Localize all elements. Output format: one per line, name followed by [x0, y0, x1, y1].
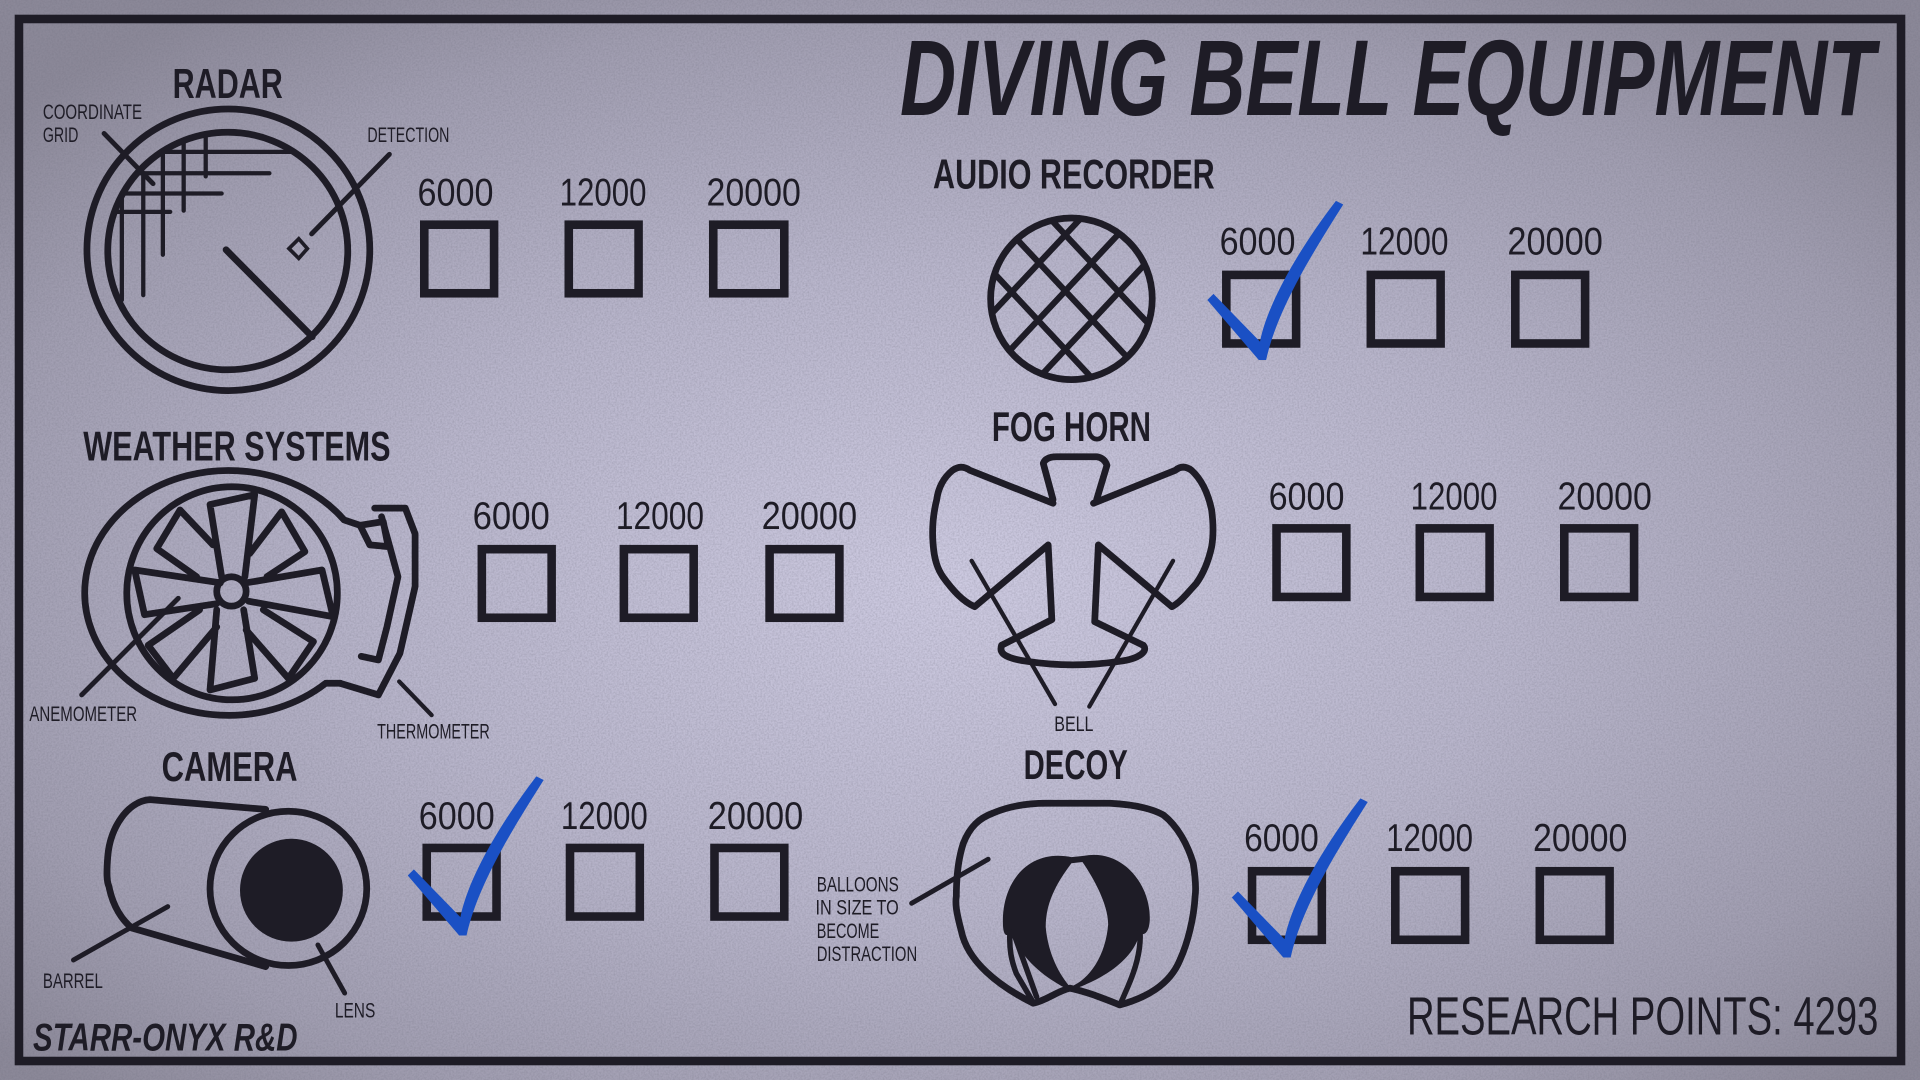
- heading: decoy: DECOY: [1024, 741, 1128, 788]
- callout: anemometer: [29, 598, 178, 726]
- heading: weather systems: WEATHER SYSTEMS: [83, 422, 391, 469]
- icon: audio recorder mesh: [987, 214, 1156, 383]
- upgrade options: fog horn: [1269, 475, 1652, 597]
- upgrade options: camera: [419, 795, 803, 917]
- panel: radar: [43, 60, 801, 391]
- panel: fog horn: [933, 403, 1652, 736]
- upgrade options: audio recorder: 20000: [1507, 221, 1603, 264]
- upgrade options: weather systems: 20000: [762, 495, 857, 538]
- callout: bell: [972, 561, 1173, 736]
- upgrade options: audio recorder: 12000: [1360, 221, 1449, 264]
- upgrade options: radar: [418, 172, 801, 293]
- check mark: camera 6000: [408, 776, 544, 936]
- heading: fog horn: FOG HORN: [992, 403, 1151, 450]
- callout: barrel: [43, 907, 168, 993]
- upgrade options: weather systems: 12000: [616, 495, 704, 538]
- upgrade options: camera: 12000: [561, 795, 648, 838]
- check mark: audio recorder 6000: [1207, 201, 1343, 360]
- callout: bell: BELL: [1054, 712, 1094, 736]
- callout: balloons: DISTRACTION: [817, 942, 917, 966]
- upgrade options: fog horn: 12000: [1411, 475, 1498, 518]
- panel: weather systems: [29, 422, 857, 743]
- upgrade options: audio recorder: 6000: [1220, 221, 1296, 264]
- check mark: decoy 6000: [1232, 798, 1368, 958]
- icon: weather systems: [85, 470, 415, 715]
- upgrade options: fog horn: 6000: [1269, 475, 1344, 518]
- callout: detection: DETECTION: [367, 123, 449, 147]
- upgrade options: radar: 20000: [707, 172, 801, 215]
- upgrade options: radar: 6000: [418, 172, 493, 215]
- callout: balloons: BECOME: [817, 919, 879, 943]
- callout: thermometer: THERMOMETER: [377, 719, 490, 743]
- upgrade options: weather systems: [473, 495, 857, 618]
- upgrade options: camera: 20000: [708, 795, 803, 838]
- callout: thermometer: [377, 682, 490, 743]
- upgrade options: camera: 6000: [419, 795, 495, 838]
- upgrade options: decoy: [1244, 817, 1627, 940]
- panel: audio recorder: [934, 160, 1602, 383]
- upgrade options: decoy: 12000: [1386, 817, 1473, 860]
- callout: balloons: IN SIZE TO: [816, 896, 899, 920]
- callout: lens: [318, 945, 375, 1023]
- callout: coordinate grid: [43, 100, 153, 184]
- callout: coordinate grid: GRID: [43, 123, 78, 147]
- heading: camera: CAMERA: [162, 743, 298, 790]
- callout: coordinate grid: COORDINATE: [43, 100, 142, 124]
- callout: lens: LENS: [335, 999, 375, 1023]
- upgrade options: audio recorder: [1220, 221, 1603, 343]
- icon: camera: [107, 800, 367, 967]
- icon: decoy: [956, 803, 1196, 1005]
- panel: camera: [43, 743, 803, 1023]
- icon: fog horn: [933, 457, 1213, 665]
- company name: STARR-ONYX R&D: [33, 1017, 298, 1060]
- callout: balloons: BALLOONS: [817, 872, 899, 896]
- callout: anemometer: ANEMOMETER: [29, 702, 137, 726]
- callout: detection: [312, 123, 449, 234]
- heading: radar: RADAR: [173, 60, 283, 107]
- upgrade options: fog horn: 20000: [1558, 475, 1652, 518]
- callout: balloons: [816, 859, 988, 966]
- icon: radar: [87, 109, 370, 391]
- upgrade options: weather systems: 6000: [473, 495, 550, 538]
- upgrade options: decoy: 6000: [1244, 817, 1319, 860]
- upgrade options: decoy: 20000: [1533, 817, 1627, 860]
- upgrade options: radar: 12000: [560, 172, 647, 215]
- heading: audio recorder: AUDIO RECORDER: [933, 151, 1215, 198]
- callout: barrel: BARREL: [43, 969, 103, 993]
- panel: decoy: [816, 741, 1627, 1005]
